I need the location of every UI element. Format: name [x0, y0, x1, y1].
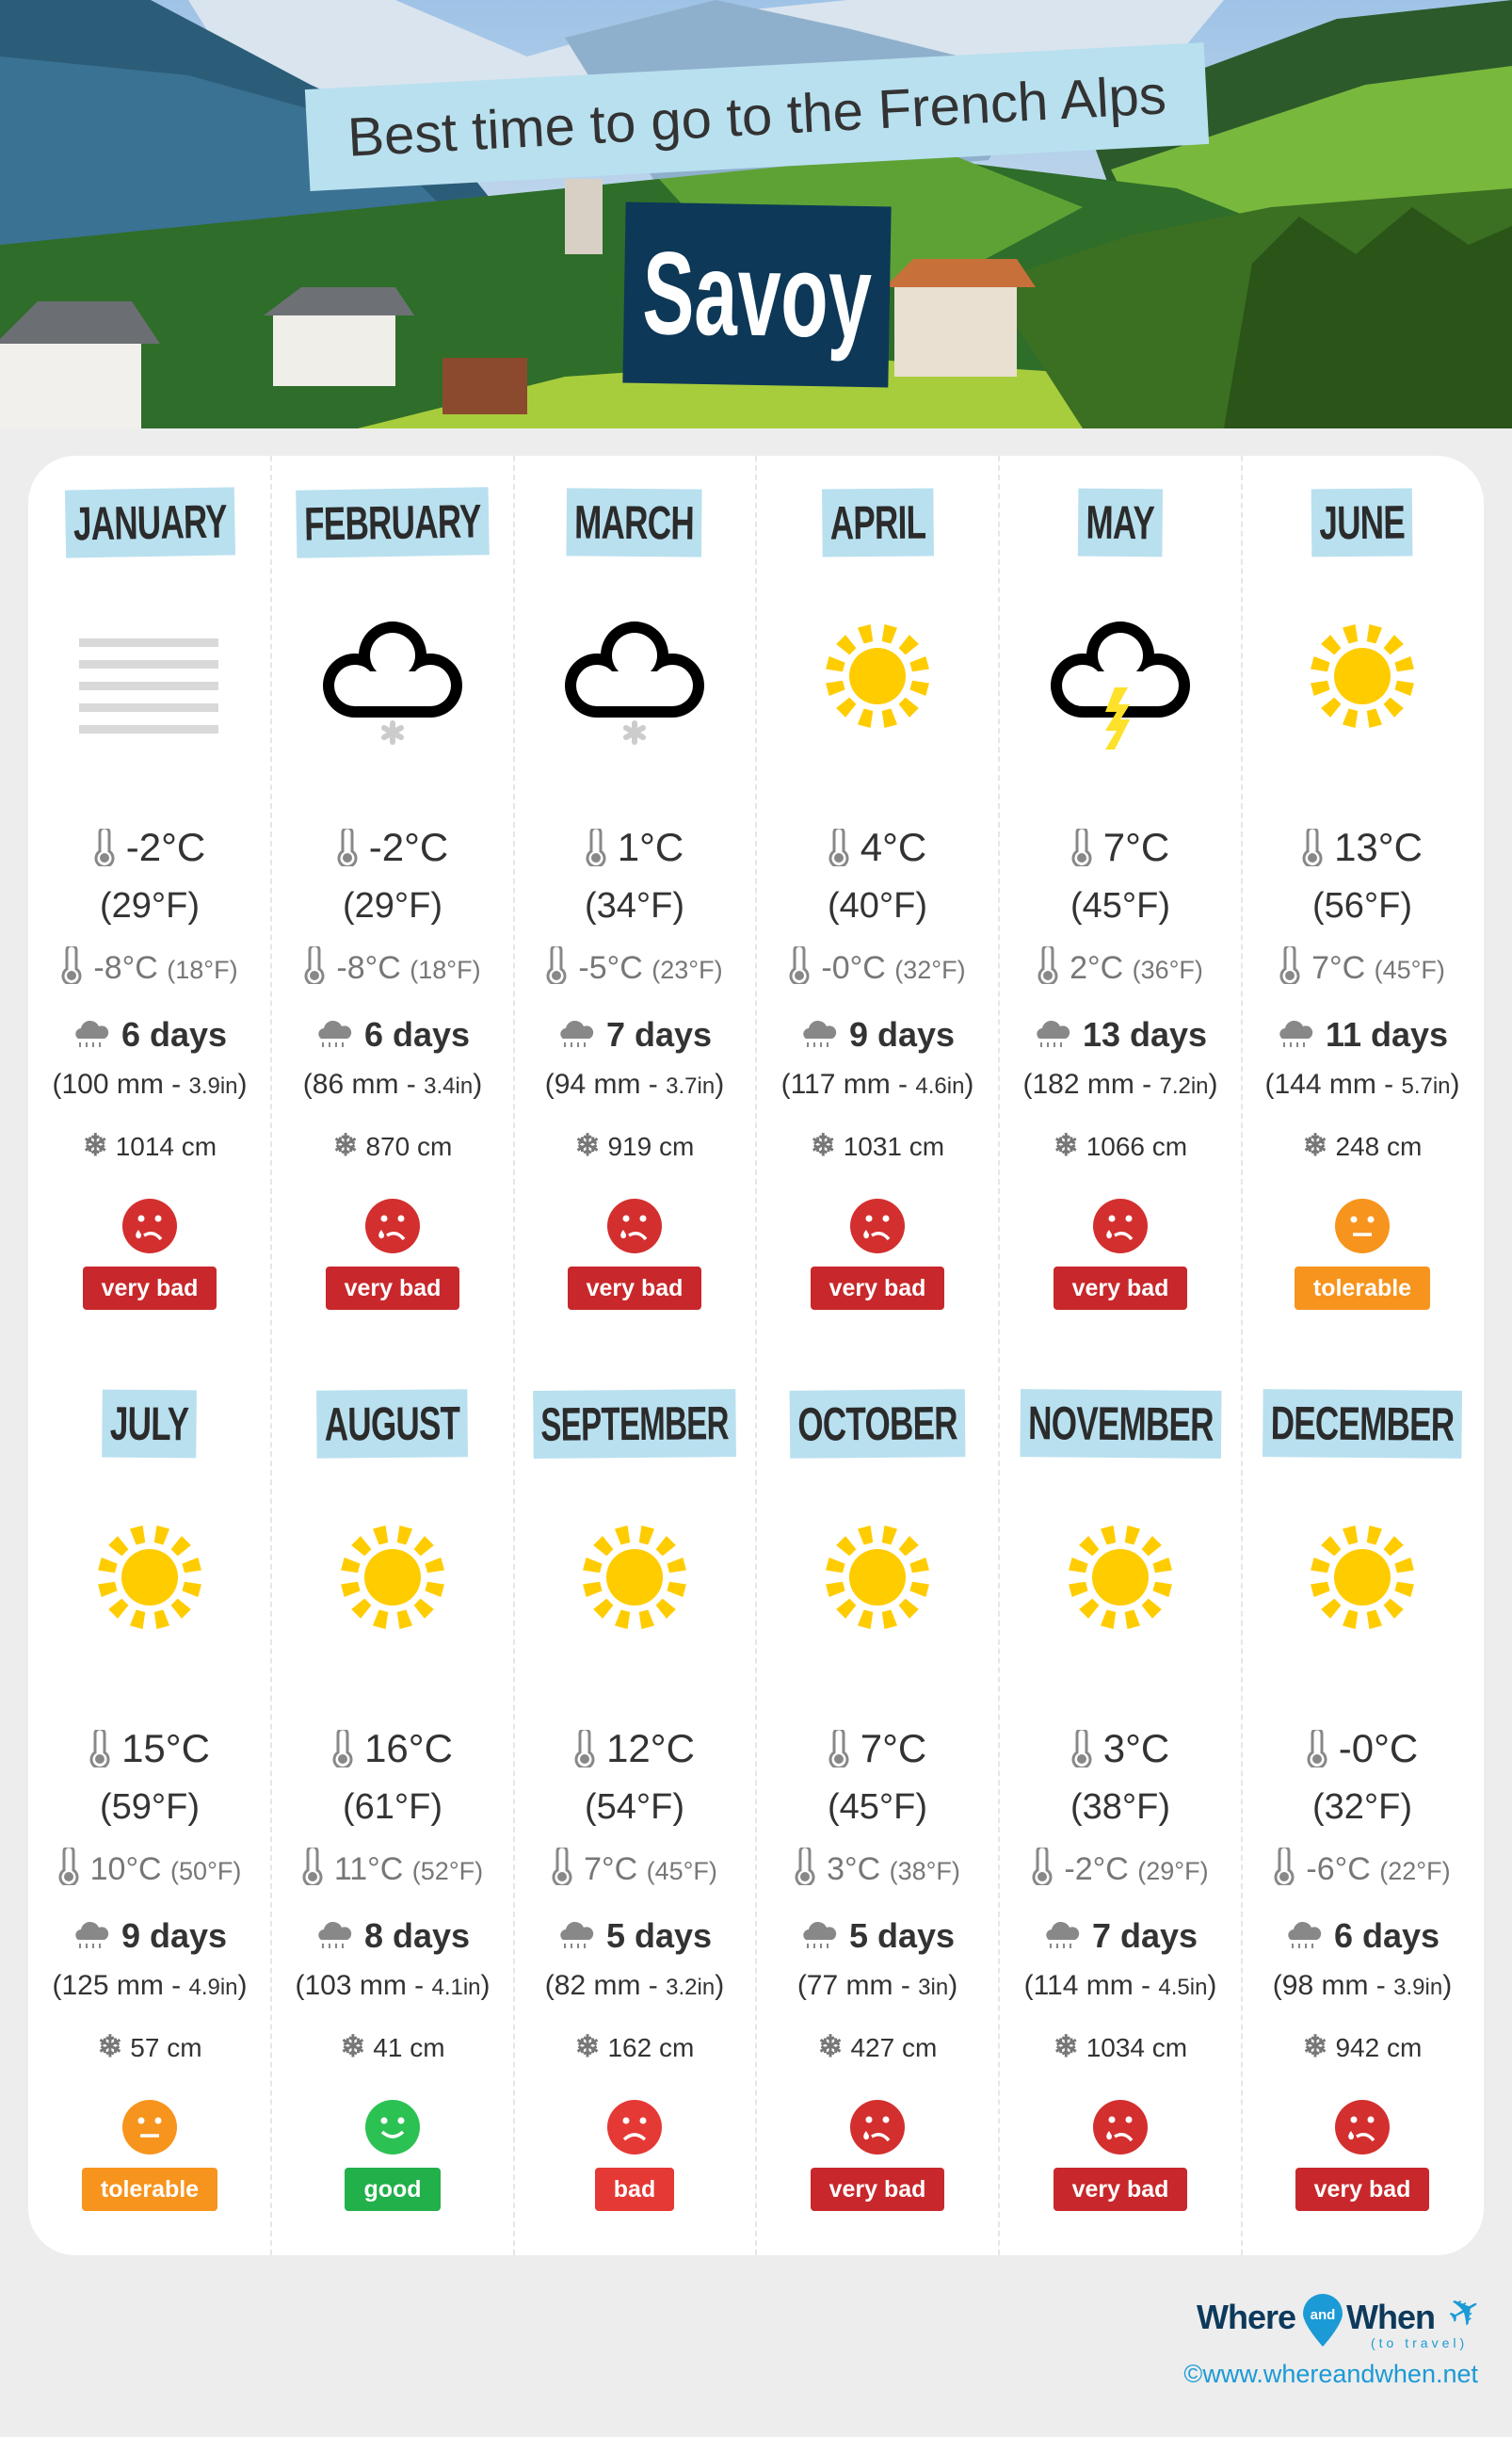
snow: ❄ 942 cm [1303, 2029, 1422, 2063]
region label: Savoy: Savoy [641, 227, 873, 363]
icon: sun [756, 1507, 999, 1648]
rain days [999, 1915, 1242, 1957]
icon: storm cloud [999, 605, 1242, 747]
rainfall: (94 mm - 3.7in) [545, 1069, 724, 1100]
rain days [1241, 1915, 1484, 1957]
rainfall: (98 mm - 3.9in) [1273, 1970, 1452, 2001]
rating badge: bad [614, 2176, 655, 2203]
rain days [271, 1915, 514, 1957]
min temp [756, 1848, 999, 1892]
rain days [28, 1915, 271, 1957]
cell: February [296, 487, 490, 1310]
logo: Where and When [1194, 2294, 1486, 2350]
main card [28, 456, 1484, 2255]
month label: DECEMBER [1270, 1396, 1455, 1451]
max temp F: (45°F) [1070, 886, 1170, 926]
rating badge: tolerable [1313, 1275, 1411, 1301]
rain days [803, 1015, 955, 1054]
max temp F: (29°F) [100, 886, 200, 926]
max temp [999, 825, 1242, 870]
rainfall: (100 mm - 3.9in) [52, 1069, 248, 1100]
month label: JULY [110, 1397, 189, 1450]
max temp [1241, 825, 1484, 870]
max temp F: (56°F) [1312, 886, 1412, 926]
max temp: 15°C [121, 1726, 210, 1770]
title banner: Best time to go to the French Alps [346, 64, 1167, 169]
icon: face very bad [850, 1199, 905, 1253]
min temp [999, 1848, 1242, 1892]
cell: August [271, 1357, 514, 2258]
rainfall: (86 mm - 3.4in) [303, 1069, 482, 1100]
max temp: 7°C [1103, 825, 1169, 869]
max temp: 1°C [618, 825, 684, 869]
cell: June [1241, 456, 1484, 1357]
icon: sun [826, 624, 929, 728]
snow: ❄ 427 cm [818, 2029, 937, 2063]
max temp F: (54°F) [585, 1787, 684, 1827]
min temp: -6°C (22°F) [1306, 1851, 1451, 1887]
min temp [28, 1848, 271, 1892]
rainfall: (103 mm - 4.1in) [295, 1970, 491, 2001]
rainfall: (117 mm - 4.6in) [781, 1069, 973, 1100]
icon: snow cloud [323, 621, 462, 745]
icon: sun [1241, 1507, 1484, 1648]
min temp: 10°C (50°F) [90, 1851, 241, 1887]
icon: face very bad [607, 1199, 662, 1253]
icon: sun [513, 1507, 756, 1648]
snow: ❄ 1014 cm [83, 1128, 217, 1162]
cell: April [781, 488, 973, 1310]
icon: face good [271, 2099, 514, 2155]
min temp: -0°C (32°F) [821, 950, 966, 986]
max temp: 3°C [1103, 1726, 1169, 1770]
snow: ❄ 248 cm [1303, 1128, 1422, 1162]
icon: fog [79, 638, 218, 734]
max temp F: (59°F) [100, 1787, 200, 1827]
rain days: 9 days [849, 1015, 955, 1054]
min temp: 7°C (45°F) [584, 1851, 717, 1887]
rainfall: (82 mm - 3.2in) [545, 1970, 724, 2001]
snow: ❄ 870 cm [333, 1128, 452, 1162]
max temp [586, 825, 684, 869]
max temp: 7°C [861, 1726, 926, 1770]
min temp: 7°C (45°F) [1311, 950, 1445, 986]
rain days: 7 days [1092, 1916, 1198, 1955]
icon: snow cloud [565, 621, 704, 745]
min temp [999, 946, 1242, 991]
rating badge: very bad [1072, 1275, 1168, 1301]
rain days [999, 1014, 1242, 1056]
month label: OCTOBER [797, 1396, 957, 1451]
min temp: -5°C (23°F) [578, 950, 723, 986]
icon: sun [28, 1507, 271, 1648]
min temp: -8°C (18°F) [336, 950, 481, 986]
rain days [756, 1915, 999, 1957]
rainfall: (77 mm - 3in) [797, 1970, 957, 2001]
month label: AUGUST [325, 1396, 460, 1451]
icon: sun [1241, 605, 1484, 747]
max temp: -0°C [1339, 1726, 1418, 1770]
rain days: 8 days [364, 1916, 470, 1955]
icon: face very bad [999, 2099, 1242, 2155]
icon: location pin: and [1311, 2307, 1335, 2323]
logo: Where and When: Where [1197, 2298, 1295, 2336]
rain days: 13 days [1083, 1015, 1207, 1054]
cell: January [52, 487, 248, 1310]
max temp [828, 825, 926, 869]
snow: ❄ 919 cm [575, 1128, 694, 1162]
snow: ❄ 1031 cm [811, 1128, 944, 1162]
rain days [1241, 1014, 1484, 1056]
max temp [1241, 1726, 1484, 1771]
rating badge: good [363, 2176, 422, 2203]
month label: APRIL [829, 496, 925, 549]
min temp [513, 1848, 756, 1892]
rain days [513, 1915, 756, 1957]
icon: face very bad [122, 1199, 177, 1253]
max temp [28, 1726, 271, 1771]
snow: ❄ 1066 cm [1054, 1128, 1187, 1162]
icon: sun [271, 1507, 514, 1648]
rain days [560, 1015, 712, 1054]
min temp [1241, 946, 1484, 991]
snow: ❄ 41 cm [340, 2029, 445, 2063]
rainfall: (182 mm - 7.2in) [1022, 1069, 1218, 1100]
logo: Where and When: When [1346, 2298, 1435, 2336]
rainfall: (144 mm - 5.7in) [1264, 1069, 1460, 1100]
max temp: -2°C [369, 825, 448, 869]
snow: ❄ 162 cm [575, 2029, 694, 2063]
month label: JUNE [1319, 496, 1406, 549]
month label: SEPTEMBER [540, 1396, 729, 1451]
icon: face tolerable [28, 2099, 271, 2155]
cell: September [513, 1357, 756, 2258]
icon: face very bad [365, 1199, 420, 1253]
icon: plane: ✈ [1439, 2283, 1490, 2340]
icon: face very bad [756, 2099, 999, 2155]
rating badge: very bad [587, 1275, 683, 1301]
icon: face tolerable [1241, 1198, 1484, 1254]
rain days: 5 days [849, 1916, 955, 1955]
max temp: 4°C [861, 825, 926, 869]
month label: MARCH [574, 495, 695, 550]
min temp: 2°C (36°F) [1070, 950, 1203, 986]
rating badge: very bad [1314, 2176, 1410, 2203]
rain days: 11 days [1326, 1015, 1448, 1054]
max temp F: (38°F) [1070, 1787, 1170, 1827]
rain days: 7 days [606, 1015, 712, 1054]
max temp: 13°C [1334, 825, 1423, 869]
rainfall: (114 mm - 4.5in) [1024, 1970, 1216, 2001]
icon: face very bad [1241, 2099, 1484, 2155]
max temp F: (32°F) [1312, 1787, 1412, 1827]
cell: November [999, 1357, 1242, 2258]
max temp F: (45°F) [828, 1787, 927, 1827]
rain days: 5 days [606, 1916, 712, 1955]
max temp: -2°C [126, 825, 205, 869]
rating badge: tolerable [101, 2176, 199, 2203]
max temp: 12°C [606, 1726, 695, 1770]
max temp: 16°C [364, 1726, 453, 1770]
month label: JANUARY [72, 495, 227, 550]
min temp [271, 1848, 514, 1892]
snow: ❄ 1034 cm [1054, 2029, 1187, 2063]
month label: MAY [1086, 496, 1154, 549]
max temp [999, 1726, 1242, 1771]
month label: NOVEMBER [1027, 1396, 1214, 1451]
cell: October [756, 1357, 999, 2258]
month label: FEBRUARY [304, 494, 481, 551]
min temp: -8°C (18°F) [93, 950, 238, 986]
min temp: -2°C (29°F) [1064, 1851, 1209, 1887]
max temp F: (34°F) [585, 886, 684, 926]
icon: face bad [513, 2099, 756, 2155]
max temp [756, 1726, 999, 1771]
rain days [75, 1015, 227, 1054]
icon: sun [999, 1507, 1242, 1648]
cell: December [1241, 1357, 1484, 2258]
rating badge: very bad [1072, 2176, 1168, 2203]
max temp F: (40°F) [828, 886, 927, 926]
rating badge: very bad [102, 1275, 198, 1301]
rainfall: (125 mm - 4.9in) [52, 1970, 248, 2001]
rating badge: very bad [829, 2176, 925, 2203]
rain days [318, 1015, 470, 1054]
rain days: 9 days [121, 1916, 227, 1955]
max temp F: (29°F) [343, 886, 442, 926]
max temp [513, 1726, 756, 1771]
cell: May [999, 456, 1242, 1357]
cell: July [28, 1357, 271, 2258]
title banner [305, 42, 1209, 191]
website url: ©www.whereandwhen.net [1183, 2360, 1478, 2388]
cell: March [545, 488, 724, 1310]
rain days: 6 days [364, 1015, 470, 1054]
max temp [271, 1726, 514, 1771]
icon: location pin [1303, 2294, 1343, 2347]
rain days: 6 days [1334, 1916, 1440, 1955]
max temp F: (61°F) [343, 1787, 442, 1827]
rating badge: very bad [345, 1275, 441, 1301]
rain days: 6 days [121, 1015, 227, 1054]
rating badge: very bad [829, 1275, 925, 1301]
icon: face very bad [999, 1198, 1242, 1254]
min temp: 3°C (38°F) [827, 1851, 960, 1887]
header photo: alpine village landscape [0, 0, 1512, 428]
min temp [1241, 1848, 1484, 1892]
min temp: 11°C (52°F) [334, 1851, 483, 1887]
snow: ❄ 57 cm [97, 2029, 202, 2063]
region label: Savoy [622, 202, 892, 387]
logo: Where and When: (to travel) [1371, 2335, 1468, 2350]
